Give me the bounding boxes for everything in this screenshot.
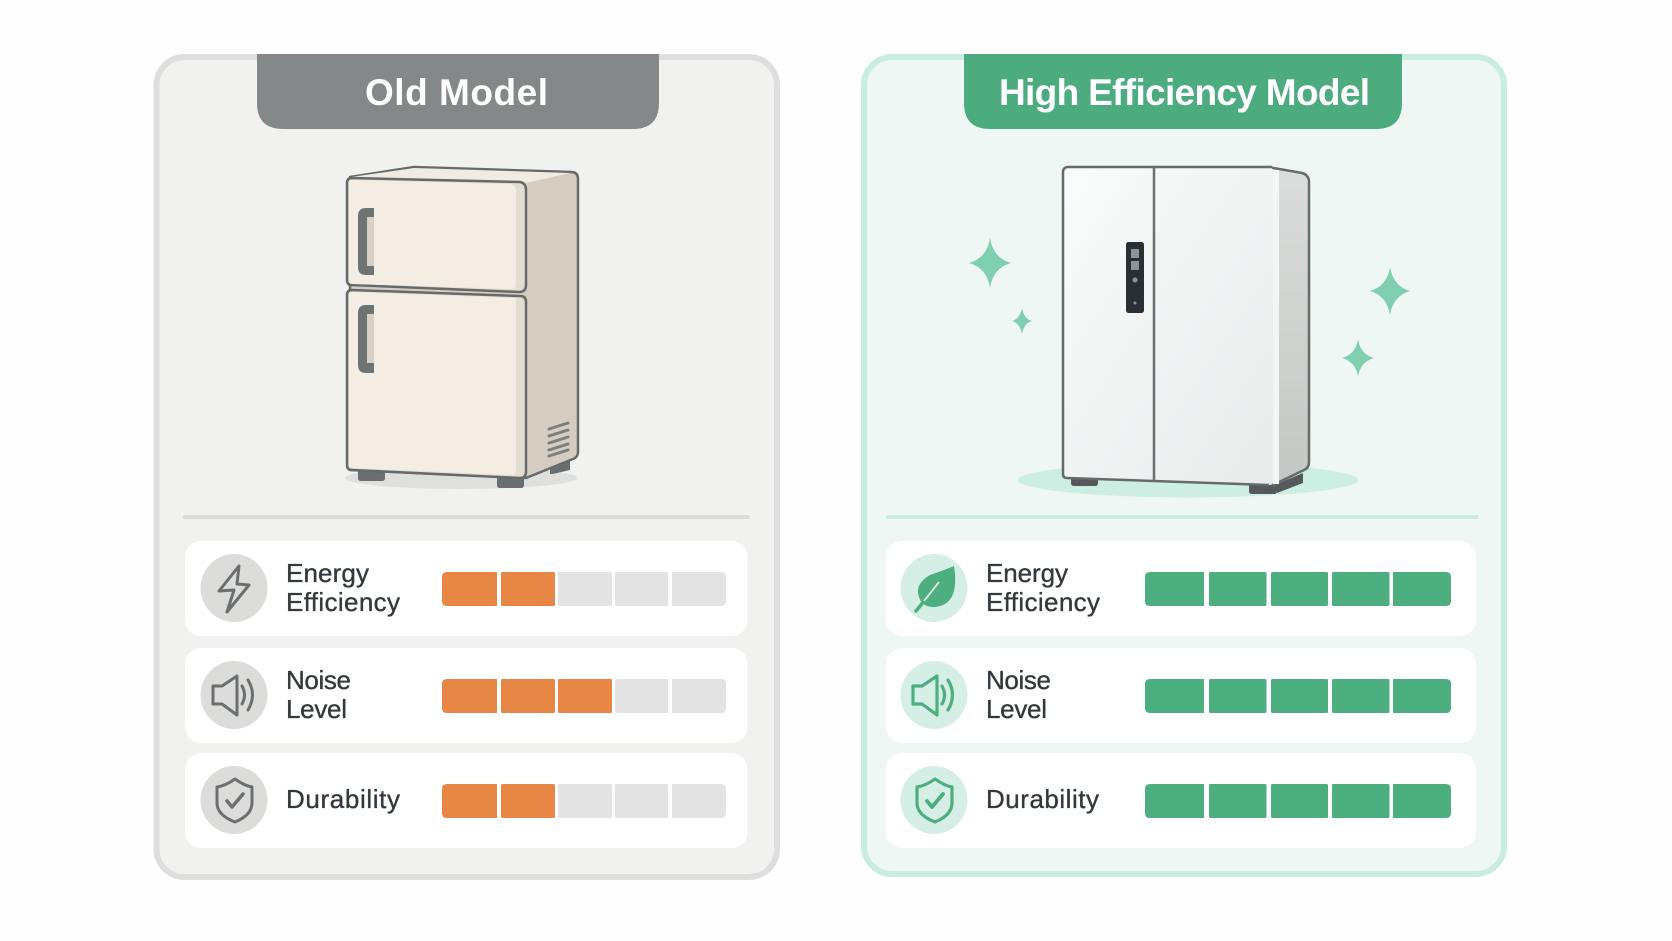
label: noise level: Level [286,694,347,724]
old model header tab: Old Model [365,72,548,113]
label: energy efficiency [286,558,400,617]
rating bar: 2 of 5 [442,572,726,606]
label: noise level: Level [986,694,1047,724]
icon: shield with check [217,779,252,822]
icon: shield with check [917,779,952,822]
rating bar: 2 of 5 [442,784,726,818]
row: durability, new [886,753,1476,848]
rating bar: 5 of 5 [1145,572,1451,606]
row: durability, old [185,753,748,848]
illustration: old two-door fridge [345,167,578,489]
label: energy efficiency: Energy [286,558,369,588]
high efficiency header tab: High Efficiency Model [999,72,1370,113]
icon: speaker [213,676,252,715]
label: noise level: Noise [286,665,351,695]
label: energy efficiency: Efficiency [986,587,1100,617]
row: noise level, old [185,648,748,743]
panel: high efficiency model [864,54,1504,874]
door handles [358,208,374,373]
illustration: side-by-side fridge [1018,167,1358,498]
label: noise level [286,665,351,724]
label: noise level: Noise [986,665,1051,695]
row: energy efficiency, old [185,541,748,636]
rating bar: 5 of 5 [1145,679,1451,713]
rating bar: 5 of 5 [1145,784,1451,818]
control display panel [1126,242,1144,313]
icon: leaf [916,566,955,611]
label: energy efficiency: Energy [986,558,1068,588]
rating bar: 3 of 5 [442,679,726,713]
label: energy efficiency [986,558,1100,617]
label: noise level [986,665,1051,724]
icon: speaker [913,676,952,715]
row: energy efficiency, new [886,541,1476,636]
label: energy efficiency: Efficiency [286,587,400,617]
sparkles [969,238,1410,377]
vent slats [549,423,568,456]
old model header tab [257,54,659,129]
panel: old model [156,54,777,877]
icon: lightning bolt [219,566,249,612]
label: durability: Durability [986,784,1099,814]
row: noise level, new [886,648,1476,743]
label: durability: Durability [286,784,400,814]
high efficiency header tab [964,54,1402,129]
